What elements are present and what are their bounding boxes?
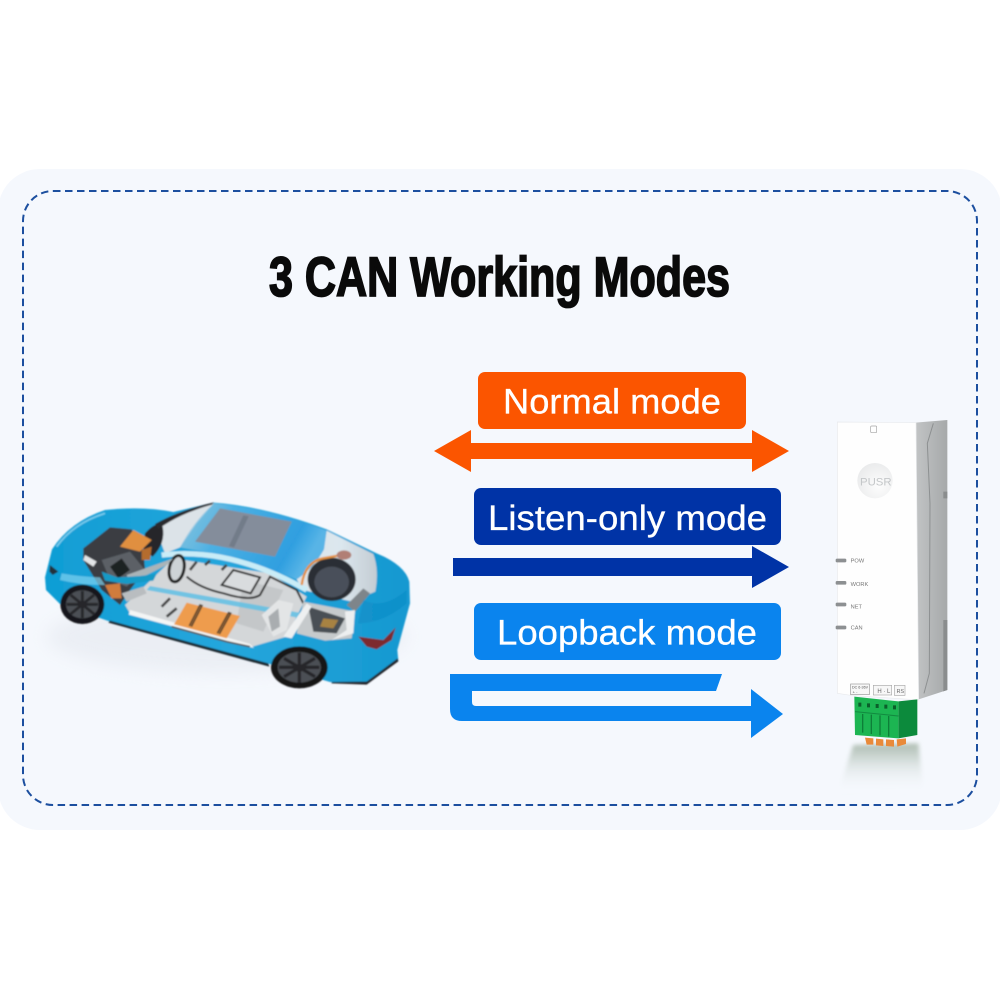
pale glow band over the floor: [162, 554, 307, 590]
car body: [45, 503, 410, 684]
terminal labels: H · L: [877, 689, 891, 695]
LED: CAN: CAN: [851, 626, 863, 632]
front wheel: [60, 585, 104, 624]
steering wheel: [167, 554, 187, 583]
LED: NET: NET: [851, 604, 863, 610]
badge: Normal mode: [478, 372, 746, 429]
headlight: [49, 565, 58, 575]
badge: Listen-only mode: Listen-only mode: [488, 499, 767, 538]
badge: Loopback mode: Loopback mode: [497, 614, 757, 652]
car roof: [180, 503, 327, 579]
panel: background card: [0, 169, 1000, 830]
illustration: electric car cutaway: [45, 502, 410, 688]
car sill dark strip: [108, 621, 269, 667]
arrow: loopback: [450, 674, 783, 738]
car sunroof: [195, 508, 292, 557]
orange pins: [865, 738, 906, 747]
terminal labels: + -: [853, 689, 858, 694]
tail light: [358, 627, 396, 649]
terminal labels: RS: [897, 689, 905, 695]
device reflection: [838, 743, 923, 792]
body highlight: [60, 573, 105, 585]
device front panel: [837, 422, 919, 700]
car rear glass: [297, 531, 377, 602]
rear wheel: [271, 646, 328, 688]
rear drive unit: [297, 602, 355, 641]
car windshield: [156, 503, 214, 553]
front engine: [83, 527, 145, 605]
car hood windshield dark: [143, 524, 163, 557]
LED: NET: [836, 603, 863, 610]
arrow: bidirectional orange: [434, 430, 789, 472]
badge: Loopback mode: [474, 603, 781, 660]
LED: POW: POW: [851, 559, 865, 565]
LED: POW: [836, 559, 865, 565]
battery pack: [174, 603, 240, 638]
rear seat frame: [262, 600, 293, 637]
device logo: [857, 463, 893, 498]
rear under bumper: [332, 658, 398, 685]
LED: WORK: [836, 581, 868, 588]
green terminal connector: [854, 697, 917, 738]
blue highlight streak: [147, 586, 303, 618]
car floor platform: [125, 558, 307, 647]
panel: dashed border: [23, 191, 977, 805]
car shadow: [47, 600, 407, 673]
arrow: one-way dark blue: [453, 546, 789, 588]
terminal labels: DC 6-36V: [852, 685, 869, 689]
terminal labels: [851, 684, 905, 695]
title: 3 CAN Working Modes: [269, 245, 730, 308]
device logo: PUSR: [860, 476, 892, 488]
rear wheel well: [308, 558, 356, 601]
badge: Normal mode: Normal mode: [503, 382, 721, 422]
LED: WORK: WORK: [851, 582, 868, 588]
device side panel: [915, 420, 947, 699]
LED: CAN: [836, 626, 863, 632]
illustration: CAN gateway device: [836, 420, 947, 792]
floor panel and cables: [222, 570, 260, 593]
top port icon: [871, 426, 877, 433]
badge: Listen-only mode: [474, 488, 781, 545]
